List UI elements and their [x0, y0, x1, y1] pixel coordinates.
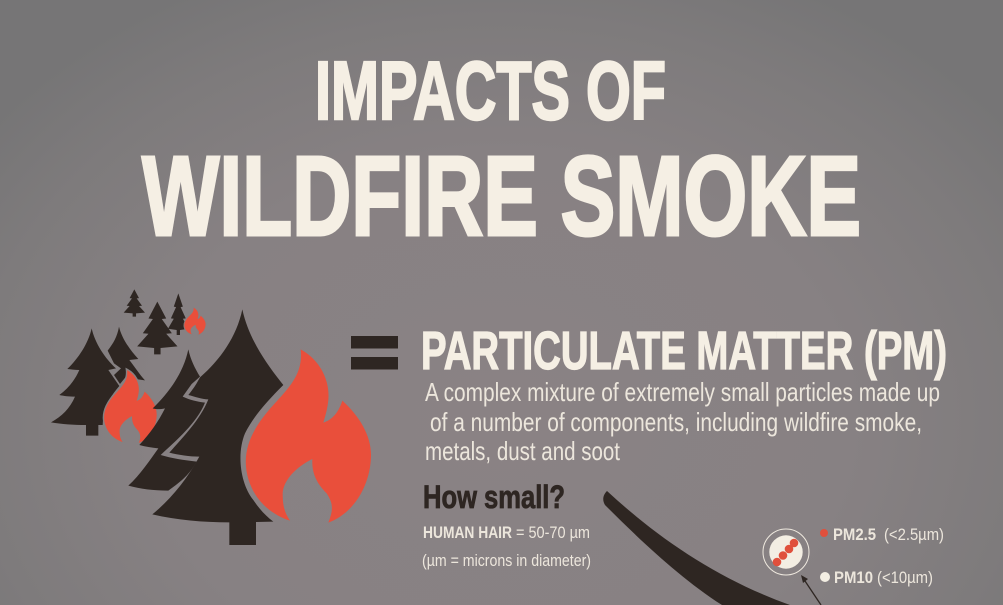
icon: burning forest	[51, 289, 371, 545]
heading: how small: How small?	[423, 479, 565, 515]
icon: left tree	[51, 328, 119, 436]
text block: human hair size	[422, 523, 591, 570]
icon: tiny flame	[184, 308, 206, 335]
icon: particle circle	[763, 529, 809, 575]
text block: definition	[425, 377, 940, 466]
text block: definition: metals, dust and soot	[425, 436, 621, 466]
icon: strand of hair	[603, 491, 790, 605]
title: IMPACTS OF	[315, 44, 666, 137]
icon: front flame	[246, 349, 371, 523]
legend: PM2.5: (<2.5µm)	[884, 525, 944, 544]
icon: front tree	[152, 309, 283, 545]
legend: PM2.5: PM2.5	[833, 525, 876, 544]
title	[142, 44, 861, 259]
icon: left flame	[104, 370, 157, 443]
legend: PM10: PM10	[834, 568, 873, 587]
icon: left back tree	[108, 327, 145, 384]
icon: small tree top left	[124, 289, 145, 317]
legend: PM10: (<10µm)	[877, 568, 933, 587]
icon: small tree right	[168, 293, 189, 335]
legend: PM10	[820, 568, 933, 587]
text block: human hair size: HUMAN HAIR	[423, 523, 512, 542]
legend: PM2.5	[820, 525, 944, 544]
text block: human hair size: (µm = microns in diameter)	[422, 551, 591, 570]
icon: small tree middle	[137, 302, 177, 354]
icon: middle tree	[128, 349, 205, 491]
arrow: to particle circle	[801, 575, 821, 605]
text block: human hair size: = 50-70 µm	[516, 523, 590, 542]
icon: equals sign	[351, 336, 398, 370]
